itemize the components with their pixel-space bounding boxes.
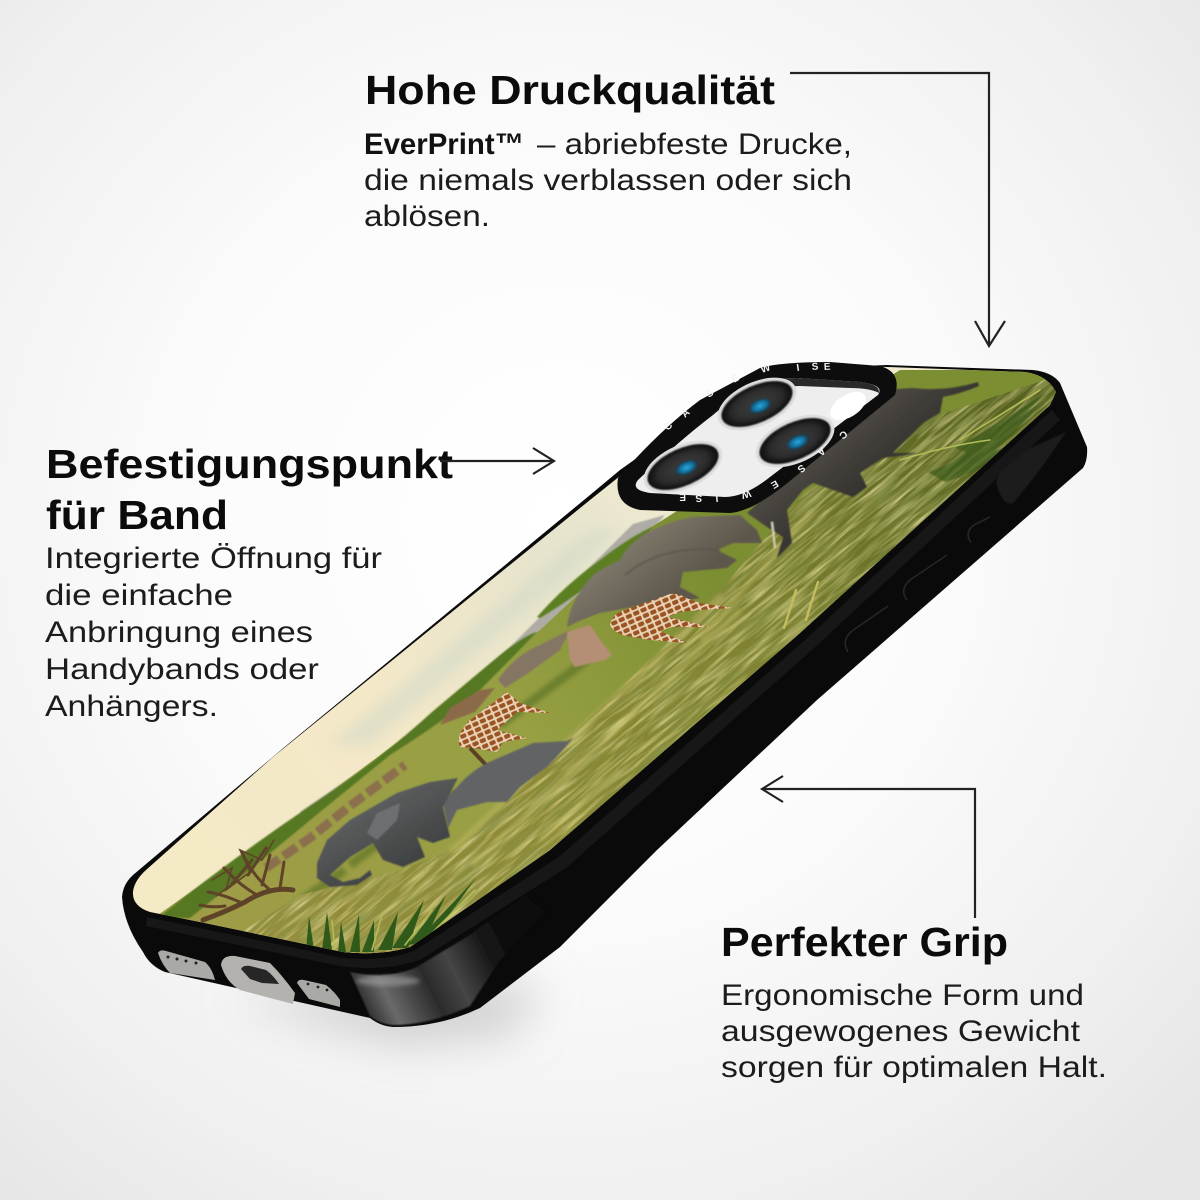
heading: strap attachment: für Band [46,492,228,538]
giraffe neck and head [567,625,612,667]
sky banding [330,530,620,745]
body text: strap attachment: Integrierte Öffnung für [45,542,382,575]
elephant far upper [747,382,979,558]
distant mountains [300,515,665,825]
foreground grass [235,375,1065,960]
speaker grille right [297,980,340,1007]
arrow: to case side [762,776,975,918]
elephant middle [567,515,762,627]
body text: strap attachment: Anbringung eines [45,616,313,649]
callout: print quality [364,67,1005,346]
phone shadow [230,985,545,1045]
heading: strap attachment [46,441,453,538]
camera bump [617,361,897,513]
far hill band [158,632,537,918]
heading: print quality: Hohe Druckqualität [365,67,775,113]
brand lettering: CASEWISE [679,428,849,503]
phone case with print [122,362,1088,1027]
foreground grass tufts [306,390,1046,952]
acacia tree [200,840,293,920]
speaker grille left [158,950,215,980]
arrow: to print surface [790,73,1005,346]
case rim [146,410,1060,968]
callout: strap attachment [45,441,554,723]
corner glare [356,976,420,986]
heading: strap attachment: Befestigungspunkt [46,441,453,487]
side buttons [845,517,990,652]
charging port [221,956,295,1004]
body text: grip: sorgen für optimalen Halt. [721,1051,1107,1084]
body text: print quality: ablösen. [364,200,490,233]
action button [968,517,990,543]
meadow tree shadows [295,650,600,905]
printed artwork [132,366,1056,954]
body text: grip: Ergonomische Form und [721,979,1084,1012]
body text: print quality: – abriebfeste Drucke, [537,128,852,161]
meadow [155,370,1065,960]
body text: grip: ausgewogenes Gewicht [721,1015,1081,1048]
volume up [904,555,947,600]
lens left [636,430,730,504]
elephant calf front [317,778,458,887]
volume down [845,606,888,652]
near hill band [537,527,652,618]
bottom corner highlight [350,895,545,1025]
body text: print quality [364,128,852,233]
giraffe lying near [610,594,733,643]
brand lettering [662,361,849,503]
camera glass [636,378,880,497]
callout: grip [721,776,1107,1084]
elephant calf back [443,738,573,828]
body text: grip [721,979,1107,1084]
inner rim shadow [745,378,879,395]
lens right [748,404,842,478]
bump frame [617,362,897,513]
brand lettering: CASEWISE [662,361,831,433]
body text: strap attachment: die einfache [45,579,233,612]
case body [122,365,1087,1027]
heading: grip: Perfekter Grip [721,919,1008,965]
tree stump [470,748,486,765]
body text: strap attachment: Handybands oder [45,653,319,686]
power button [997,432,1066,504]
body text: strap attachment: Anhängers. [45,690,218,723]
flash [825,386,871,426]
giraffe far [459,692,550,752]
body text: print quality: EverPrint™ [364,128,524,161]
grass texture [244,380,1056,954]
arrow: to strap point [440,448,554,474]
lens top [710,367,804,441]
sky [130,360,1060,960]
body text: strap attachment [45,542,382,723]
distant animal herd [266,630,570,868]
grass ridge light streaks [450,510,812,866]
body text: print quality: die niemals verblassen oder sich [364,164,852,197]
